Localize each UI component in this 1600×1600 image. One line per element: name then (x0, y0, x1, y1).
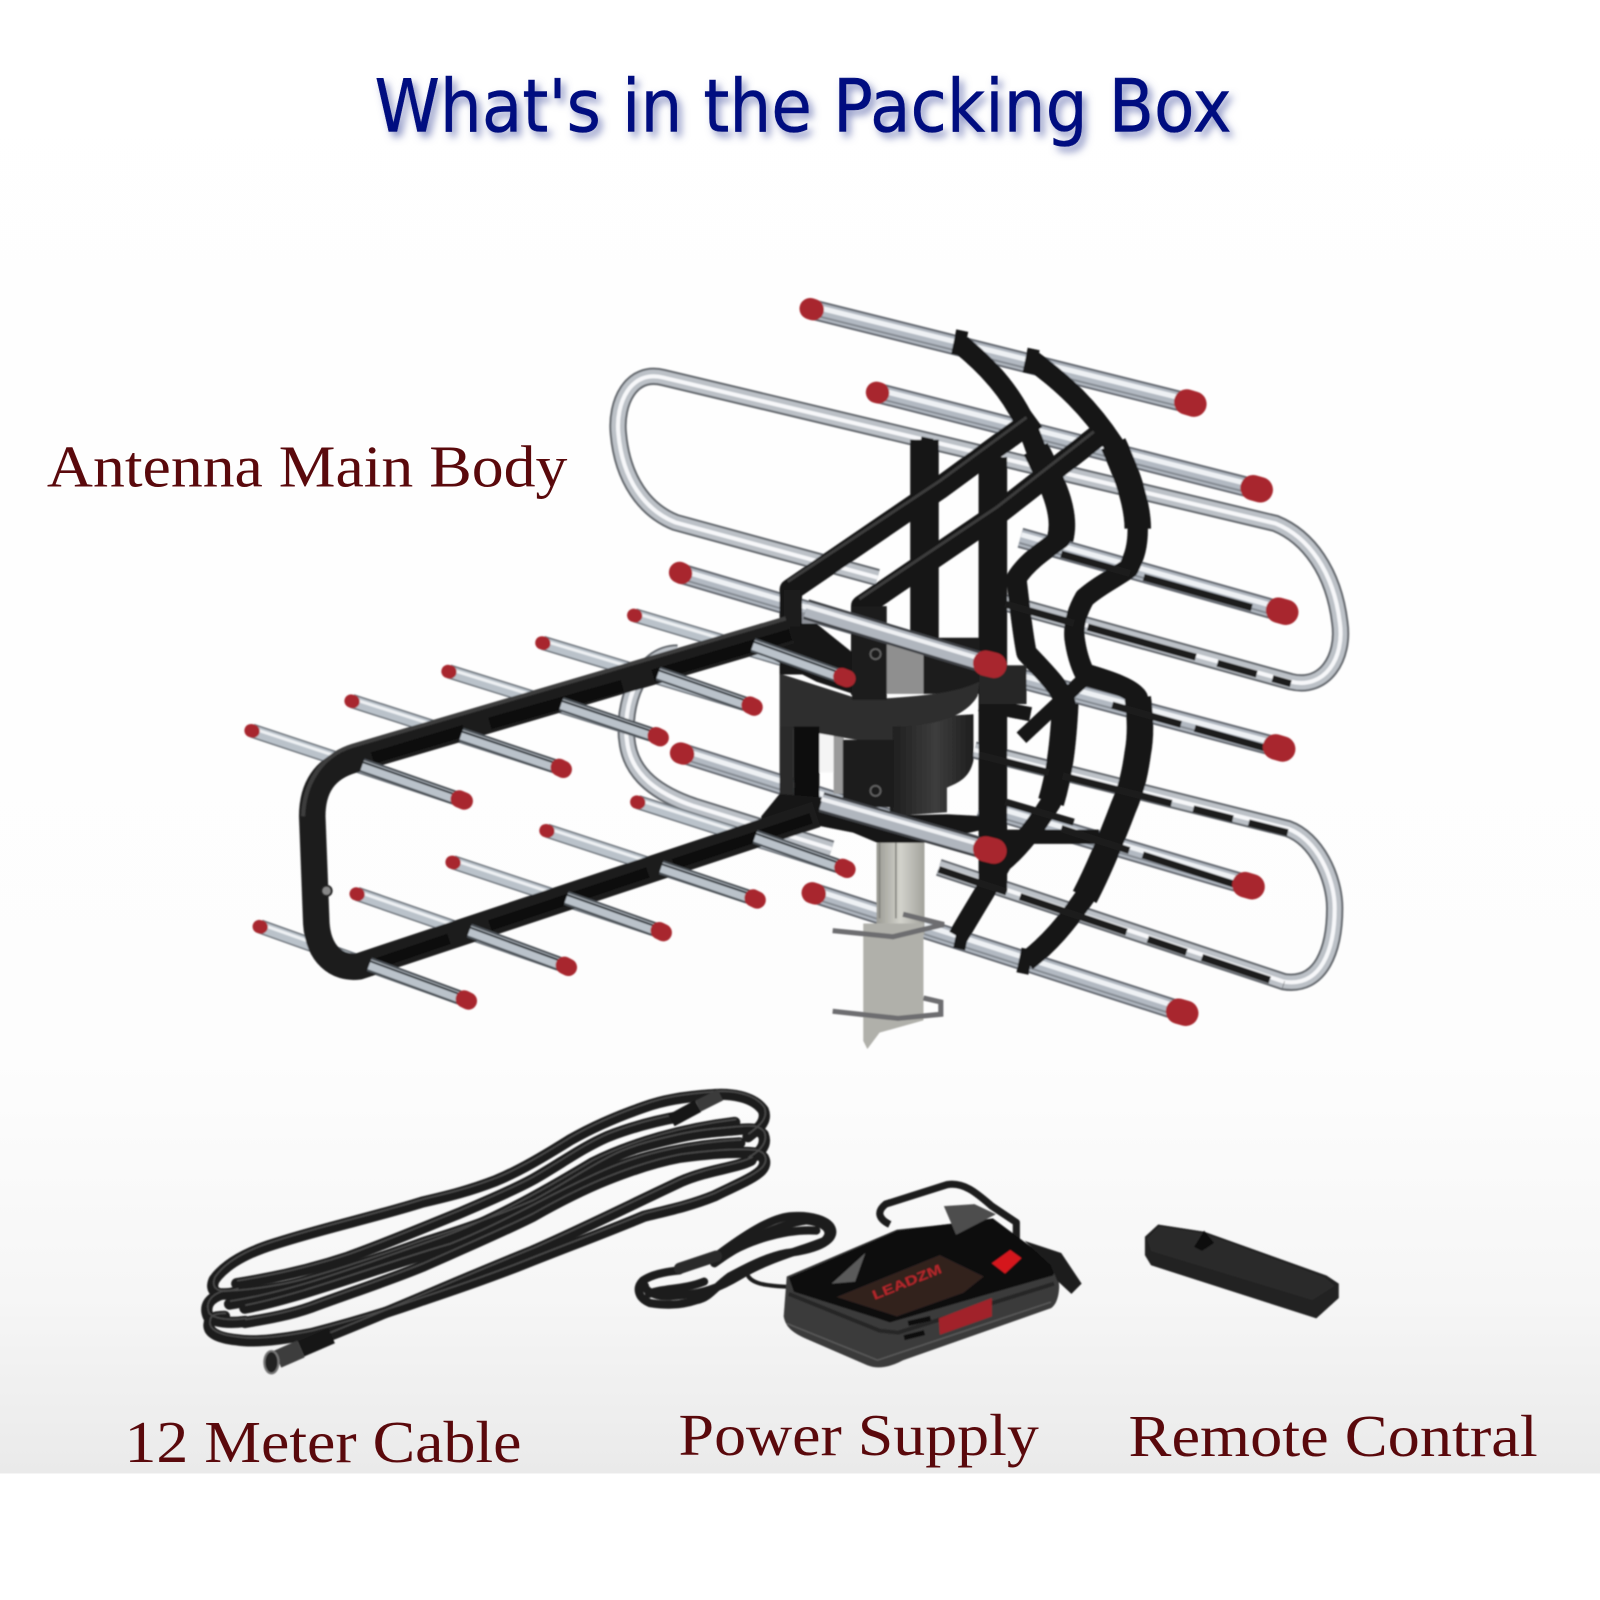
left black dipole frame (303, 618, 816, 967)
black support arms and posts (791, 424, 1094, 878)
red switch (992, 1250, 1021, 1273)
cable strands (207, 1094, 765, 1341)
body base (784, 1219, 1059, 1367)
power supply unit (639, 1184, 1082, 1367)
red end caps (251, 309, 1286, 1013)
power cord coil (639, 1216, 832, 1305)
vents (904, 1318, 931, 1338)
title: What's in the Packing Box (374, 65, 1232, 150)
rod reflection overlays on right side (939, 554, 1291, 985)
hub legs (780, 727, 794, 800)
side plug (1024, 1241, 1082, 1294)
connector: cable top end (671, 1095, 720, 1120)
remote control (1145, 1224, 1339, 1318)
left front rod halves (362, 642, 846, 1000)
tray top (789, 1218, 1057, 1322)
antenna main body illustration (251, 306, 1341, 1049)
top blocks (760, 623, 853, 694)
grey rear panel (884, 643, 924, 694)
connector: cable bottom end (264, 1336, 332, 1373)
rotor cylinder (890, 714, 973, 816)
rotor hub housing (760, 590, 1027, 843)
upper collar (780, 673, 980, 747)
label: 12 meter cable: 12 Meter Cable (124, 1409, 521, 1475)
handle loop (880, 1184, 1016, 1239)
back chrome rods (252, 306, 1341, 1017)
label plate (837, 1255, 984, 1316)
tray highlights (944, 1204, 996, 1235)
lower joint (761, 794, 988, 843)
red front label (939, 1298, 992, 1335)
rod clamps (922, 331, 1034, 973)
front chrome rods (806, 606, 992, 851)
label: antenna main body: Antenna Main Body (47, 434, 568, 500)
coaxial cable coil (207, 1091, 766, 1373)
label: power supply: Power Supply (679, 1402, 1039, 1468)
brand text on plate: LEADZM (870, 1261, 944, 1303)
curved black reflector ribs (958, 345, 1140, 961)
mounting mast and bracket (833, 843, 944, 1049)
label: remote control: Remote Contral (1129, 1403, 1538, 1469)
